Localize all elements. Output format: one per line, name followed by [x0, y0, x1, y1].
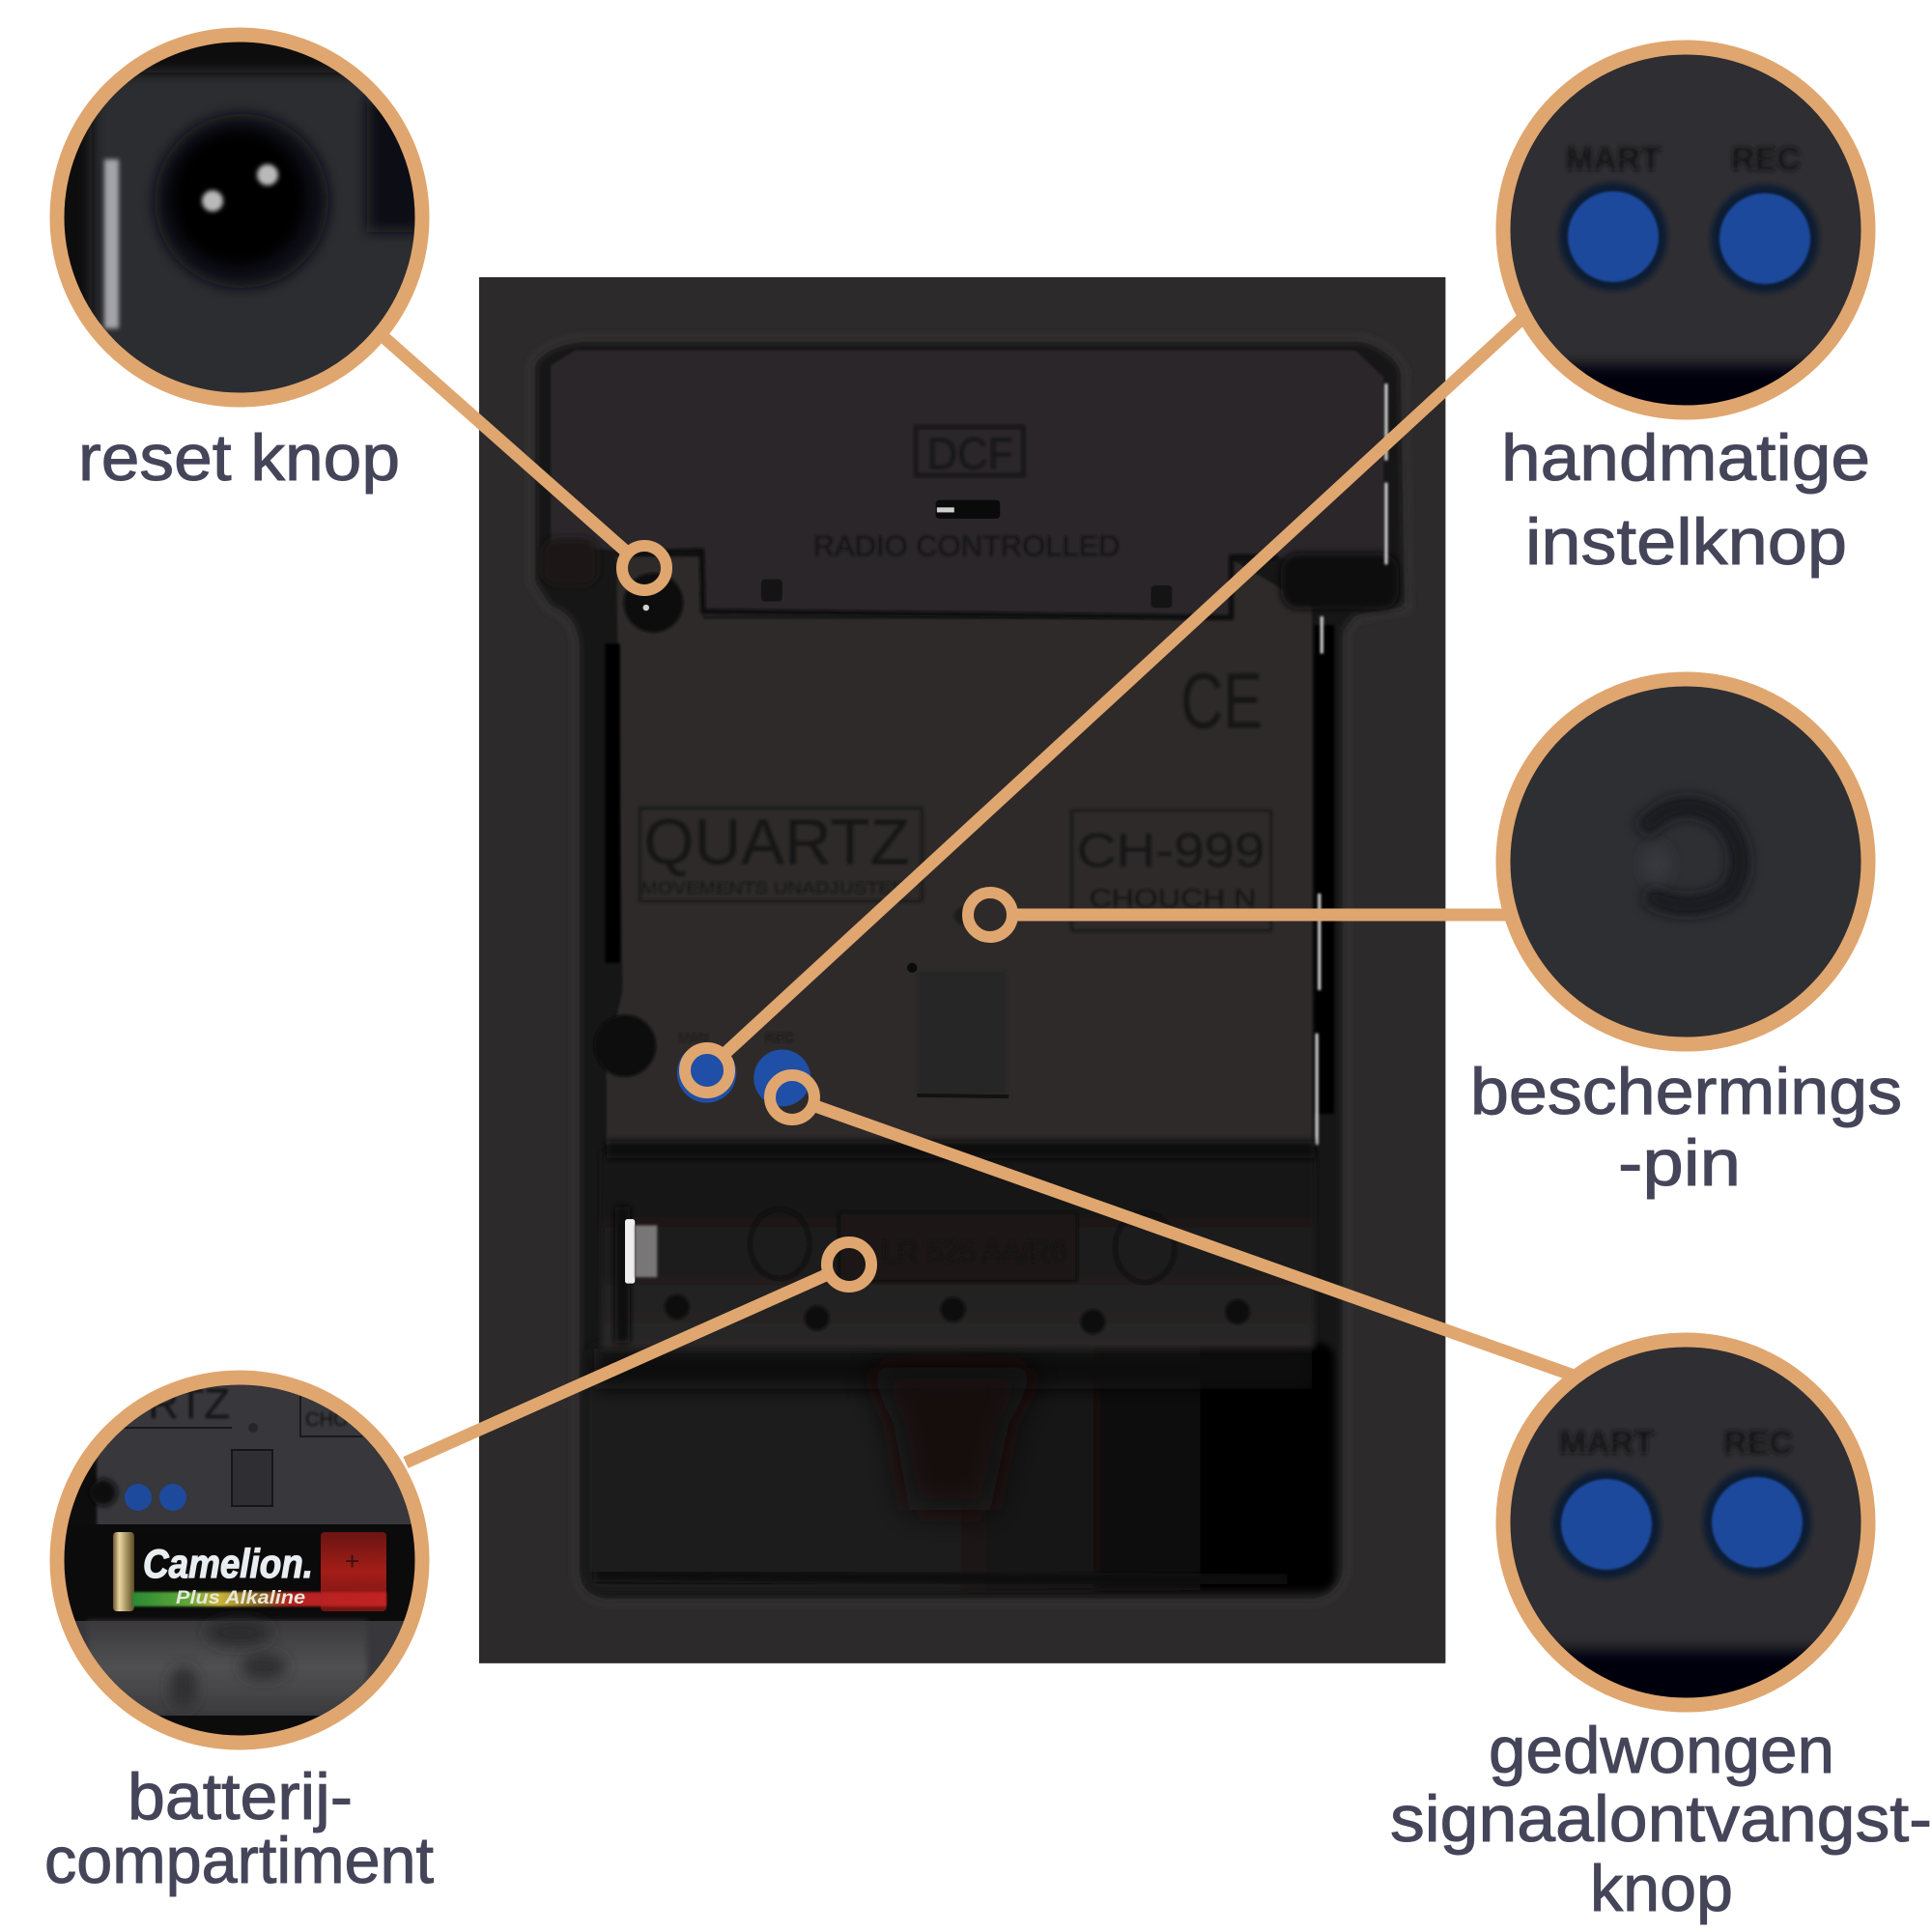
photo: back of clock with movement and battery compartment: MAN: [678, 1030, 708, 1045]
callout line: handmatige instelknop: [725, 315, 1526, 1053]
CE mark: CE: [1180, 657, 1263, 745]
DCF marking: [916, 427, 1024, 475]
marker ring: reset knop: [622, 546, 667, 590]
detail circle: gedwongen signaalontvangst-knop: MART: [1559, 1425, 1654, 1462]
marker ring: gedwongen signaalontvangst-knop: [770, 1075, 814, 1120]
metal glints: [1317, 384, 1386, 1145]
label: batterijcompartiment: batterij-: [128, 1760, 353, 1833]
label: handmatige instelknop: instelknop: [1525, 505, 1847, 579]
lower empty recess: [1094, 1343, 1335, 1592]
detail circle: batterijcompartiment: Camelion.: [143, 1541, 313, 1586]
label: gedwongen signaalontvangst-knop: [1390, 1714, 1932, 1925]
label: batterijcompartiment: compartiment: [44, 1824, 434, 1897]
detail circle: beschermingspin: [1503, 676, 1868, 1044]
callout line: batterijcompartiment: [406, 1275, 826, 1463]
photo: back of clock with movement and battery compartment: MOVEMENTS UNADJUSTED: [641, 878, 906, 897]
callout line: gedwongen signaalontvangst-knop: [815, 1106, 1577, 1377]
detail circle: batterijcompartiment: RTZ: [148, 1380, 230, 1428]
protection pin hole: [954, 907, 964, 924]
detail circle: handmatige instelknop: REC: [1731, 141, 1801, 178]
battery compartment: [600, 1272, 1317, 1350]
label: beschermingspin: [1470, 1055, 1902, 1200]
detail circle: gedwongen signaalontvangst-knop: REC: [1723, 1425, 1793, 1462]
detail circle: reset knop: [48, 29, 435, 400]
marker ring: beschermingspin: [968, 893, 1012, 937]
photo: back of clock with movement and battery compartment: QUARTZ: [643, 807, 910, 878]
callout line: reset knop: [382, 335, 625, 551]
label: handmatige instelknop: handmatige: [1501, 421, 1870, 495]
detail circle: handmatige instelknop: [1497, 47, 1874, 423]
detail circle: handmatige instelknop: MART: [1566, 141, 1661, 178]
reset hole: [624, 573, 683, 633]
detail circle: gedwongen signaalontvangst-knop: [1497, 1338, 1874, 1708]
label: gedwongen signaalontvangst-knop: signaalontvangst-: [1390, 1782, 1932, 1856]
label: gedwongen signaalontvangst-knop: knop: [1590, 1852, 1733, 1925]
detail circle: batterijcompartiment: CHO: [305, 1409, 348, 1431]
screws: [549, 535, 599, 551]
marker ring: handmatige instelknop: [685, 1048, 729, 1093]
lower plate of movement: [607, 557, 1312, 1145]
photo: back of clock with movement and battery compartment: REC: [765, 1030, 794, 1045]
top plate of movement: [551, 351, 1383, 616]
detail circle: batterijcompartiment: [57, 1377, 425, 1764]
blue buttons: [677, 1043, 736, 1103]
label: reset knop: reset knop: [78, 421, 400, 495]
photo: back of clock with movement and battery compartment: CHOUCH N: [1089, 884, 1256, 913]
photo: back of clock with movement and battery compartment: RADIO CONTROLLED: [813, 528, 1120, 562]
callout line: beschermingspin: [1014, 908, 1512, 922]
label: beschermingspin: -pin: [1618, 1126, 1741, 1200]
marker ring: batterijcompartiment: [827, 1242, 871, 1287]
photo: back of clock with movement and battery compartment: CH-999: [1077, 825, 1264, 877]
battery: [113, 1532, 388, 1611]
photo: back of clock with movement and battery compartment: LR 525 AA/R6: [881, 1235, 1066, 1270]
CH-999 marking: [1072, 810, 1271, 930]
label: beschermingspin: beschermings: [1470, 1055, 1902, 1128]
label: batterijcompartiment: [44, 1760, 434, 1897]
photo: back of clock with movement and battery compartment: DCF: [927, 429, 1013, 479]
label: handmatige instelknop: [1501, 421, 1870, 579]
black recess beside buttons: [594, 1015, 656, 1077]
photo: back of clock with movement and battery compartment: [479, 277, 1445, 1663]
label: gedwongen signaalontvangst-knop: gedwongen: [1489, 1714, 1834, 1787]
detail circle: batterijcompartiment: Plus Alkaline: [176, 1588, 305, 1608]
QUARTZ marking: [639, 809, 922, 901]
detail circle: batterijcompartiment: +: [345, 1547, 359, 1576]
